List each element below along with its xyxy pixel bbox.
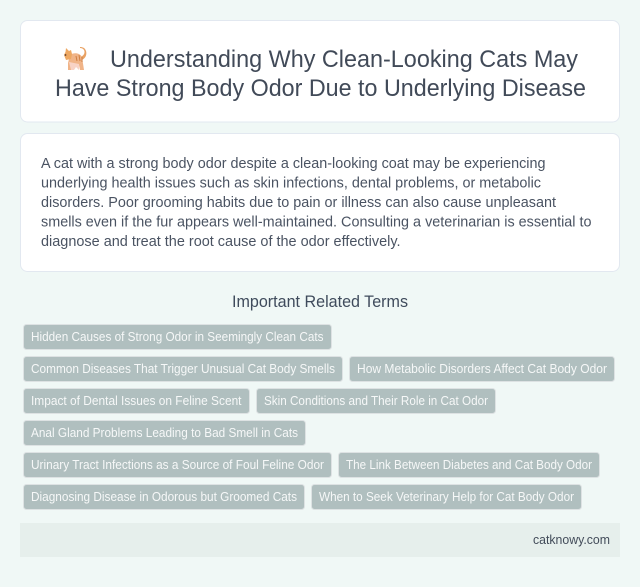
description text: diagnose and treat the root cause of the odor effectively. xyxy=(41,234,400,250)
title text: Understanding Why Clean-Looking Cats May xyxy=(110,46,578,73)
tag xyxy=(24,324,332,350)
tag: Urinary Tract Infections as a Source of Foul Feline Odor xyxy=(31,458,324,472)
tag xyxy=(24,484,304,510)
icon: cat xyxy=(64,47,86,70)
description text: disorders. Poor grooming habits due to pain or illness can also cause unpleasant xyxy=(41,195,556,211)
description text xyxy=(41,156,592,250)
tag: Hidden Causes of Strong Odor in Seemingly Clean Cats xyxy=(31,330,324,344)
tag: How Metabolic Disorders Affect Cat Body Odor xyxy=(357,362,607,376)
tag: Common Diseases That Trigger Unusual Cat Body Smells xyxy=(31,362,335,376)
footer xyxy=(20,523,620,557)
tag: Impact of Dental Issues on Feline Scent xyxy=(31,394,242,408)
title text: Have Strong Body Odor Due to Underlying Disease xyxy=(55,75,586,102)
description text: smells even if the fur appears well-maintained. Consulting a veterinarian is essential to xyxy=(41,214,592,230)
tag xyxy=(338,452,600,478)
tag list xyxy=(24,324,614,510)
panel: description card xyxy=(20,134,620,272)
tag xyxy=(24,388,250,414)
panel: title card xyxy=(20,20,620,122)
tag xyxy=(24,452,332,478)
description text: underlying health issues such as skin infections, dental problems, or metabolic xyxy=(41,176,542,192)
tag: The Link Between Diabetes and Cat Body Odor xyxy=(346,458,592,472)
title text xyxy=(55,46,586,102)
tag: Skin Conditions and Their Role in Cat Odor xyxy=(264,394,488,408)
tag: Anal Gland Problems Leading to Bad Smell in Cats xyxy=(31,426,298,440)
heading: important related terms: Important Related Terms xyxy=(232,293,408,311)
tag xyxy=(350,356,614,382)
tag xyxy=(256,388,496,414)
tag xyxy=(24,356,342,382)
tag xyxy=(312,484,582,510)
tag: Diagnosing Disease in Odorous but Groomed Cats xyxy=(31,490,297,504)
description text: A cat with a strong body odor despite a clean-looking coat may be experiencing xyxy=(41,156,546,172)
tag: When to Seek Veterinary Help for Cat Body Odor xyxy=(319,490,574,504)
footer: catknowy.com xyxy=(533,532,610,547)
tag xyxy=(24,420,306,446)
